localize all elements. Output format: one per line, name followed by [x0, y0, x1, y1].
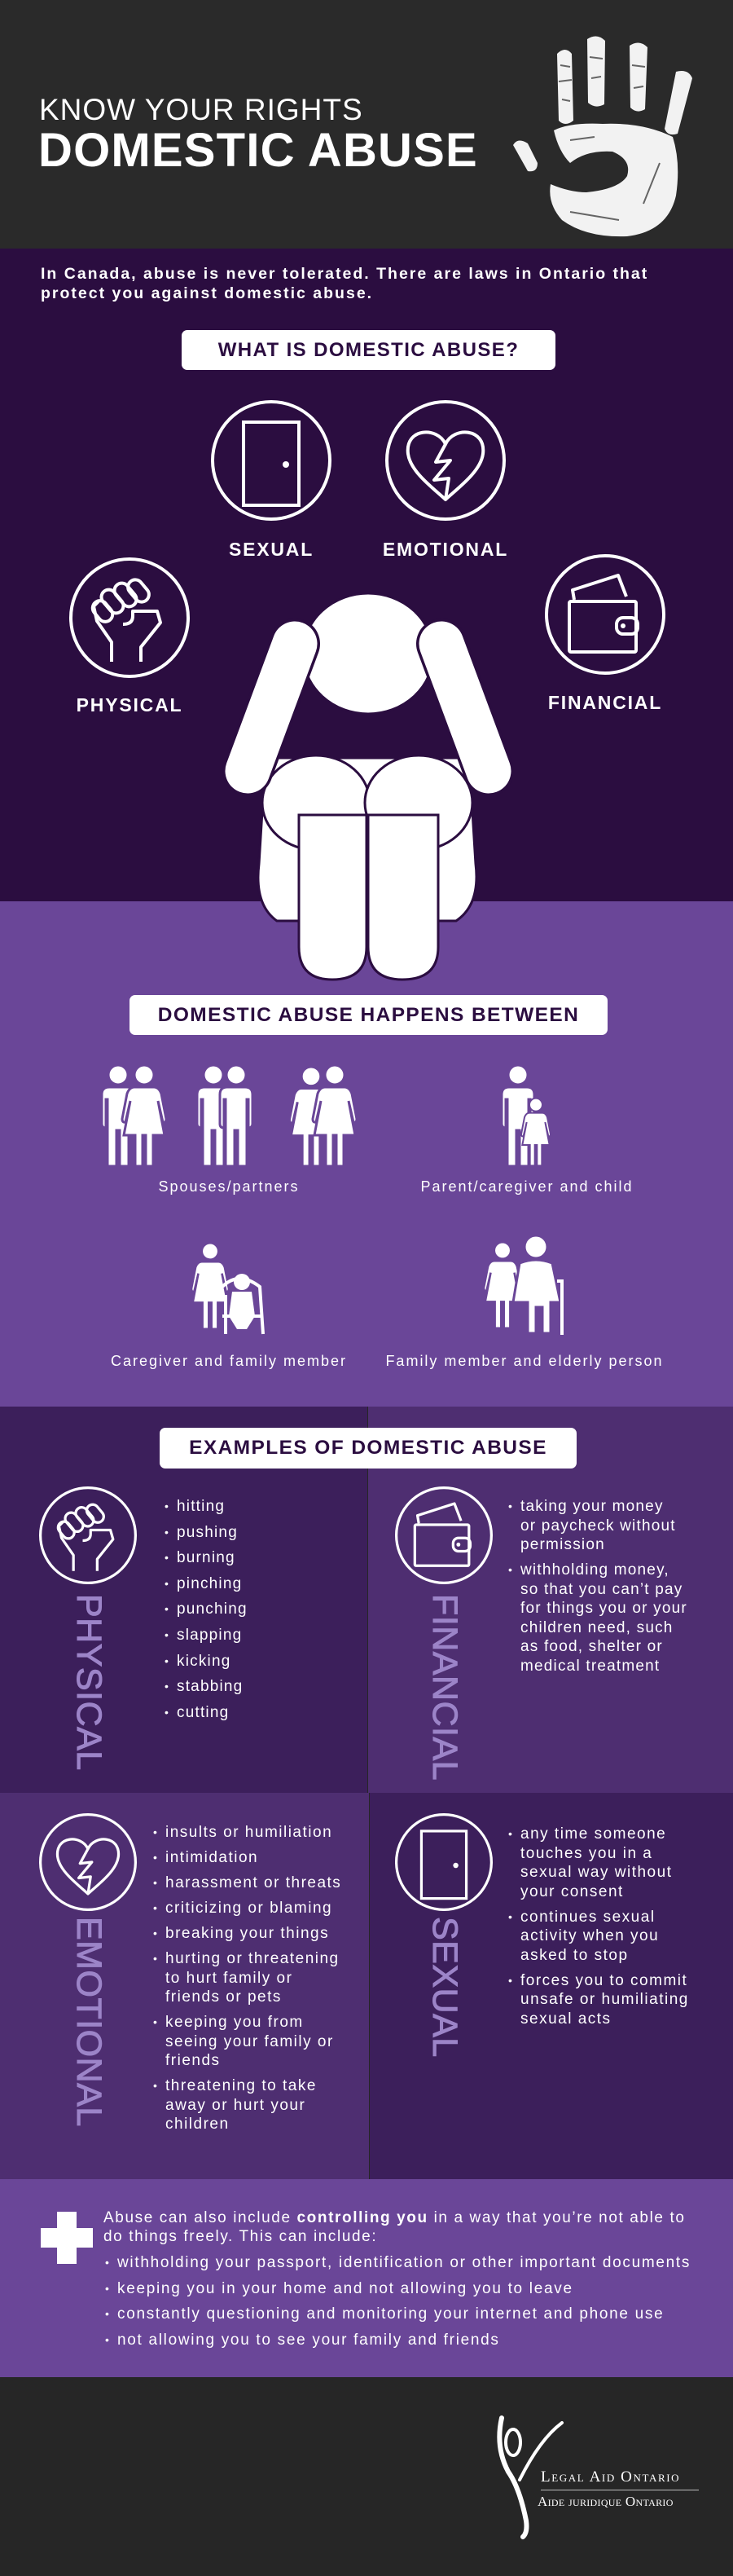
- list: financial: permission: [520, 1536, 605, 1553]
- icon: sexual door: [211, 400, 331, 521]
- list: sexual: forces you to commit: [520, 1972, 687, 1988]
- list: controlling: not allowing you to see your family and friends: [117, 2332, 500, 2349]
- heading box: what is domestic abuse: [182, 330, 555, 370]
- label: financial: FINANCIAL: [548, 692, 662, 713]
- panel: what is domestic abuse: [0, 249, 733, 901]
- heading box: happens between: DOMESTIC ABUSE HAPPENS BETWEEN: [158, 1004, 579, 1026]
- label: physical: PHYSICAL: [77, 694, 182, 716]
- list: physical: hitting: [177, 1498, 225, 1515]
- list: controlling: [106, 2254, 691, 2349]
- list: emotional: hurting or threatening: [165, 1950, 340, 1967]
- icon: financial wallet small: [395, 1486, 493, 1584]
- panel: examples emotional: [0, 1793, 369, 2179]
- list: emotional: friends or pets: [165, 1988, 282, 2006]
- icon: sexual door small: [395, 1813, 493, 1911]
- logo: legal aid ontario: Aide juridique Ontario: [538, 2494, 674, 2509]
- list: financial: so that you can’t pay: [520, 1581, 683, 1597]
- vertical label: financial: FINANCIAL: [425, 1594, 464, 1781]
- list: emotional: children: [165, 2116, 230, 2133]
- title: domestic abuse: DOMESTIC ABUSE: [38, 124, 478, 177]
- list: sexual: continues sexual: [520, 1909, 656, 1925]
- list: sexual: activity when you: [520, 1927, 659, 1944]
- caption: family member and elderly person: Family member and elderly person: [385, 1353, 664, 1369]
- vertical label: physical: PHYSICAL: [69, 1594, 108, 1771]
- heading box: happens between: [129, 995, 608, 1035]
- text: controlling intro: Abuse can also include controlling you in a way that you’re not able to: [103, 2209, 686, 2226]
- panel: examples physical: [0, 1407, 367, 1793]
- list: sexual: [508, 1825, 689, 2028]
- icon: financial wallet: [545, 554, 665, 675]
- heading box: what is domestic abuse: WHAT IS DOMESTIC ABUSE?: [218, 339, 519, 361]
- text: controlling intro: [103, 2209, 686, 2245]
- panel: controlling: [0, 2179, 733, 2377]
- vertical label: emotional: EMOTIONAL: [69, 1917, 108, 2127]
- list: sexual: asked to stop: [520, 1946, 629, 1964]
- list: physical: burning: [177, 1549, 235, 1566]
- heading box: examples: EXAMPLES OF DOMESTIC ABUSE: [189, 1437, 547, 1459]
- icon: emotional heart small: [39, 1813, 137, 1911]
- list: controlling: withholding your passport, identification or other important documents: [117, 2254, 691, 2271]
- list: physical: kicking: [177, 1653, 230, 1670]
- list: financial: withholding money,: [520, 1561, 669, 1579]
- icon: spouses couples: [103, 1066, 355, 1165]
- list: emotional: threatening to take: [165, 2077, 317, 2094]
- icon: emotional heart: [385, 400, 506, 521]
- panel: examples sexual: [370, 1793, 733, 2179]
- footer panel: [0, 2377, 733, 2576]
- list: emotional: intimidation: [165, 1849, 258, 1866]
- list: physical: [165, 1498, 248, 1721]
- icon: physical fist small: [39, 1486, 137, 1584]
- list: financial: as food, shelter or: [520, 1638, 663, 1655]
- caption: spouses/partners: Spouses/partners: [158, 1178, 300, 1195]
- panel: examples financial: [368, 1407, 733, 1793]
- list: emotional: away or hurt your: [165, 2096, 305, 2114]
- header panel: [0, 0, 733, 249]
- icon: parent and child: [503, 1066, 550, 1165]
- list: sexual: sexual acts: [520, 2010, 612, 2028]
- list: physical: pinching: [177, 1575, 242, 1592]
- text: controlling intro: do things freely. This can include:: [103, 2228, 377, 2245]
- logo: legal aid ontario: [497, 2415, 699, 2539]
- label: sexual: SEXUAL: [229, 539, 314, 560]
- intro text: In Canada, abuse is never tolerated. There are laws in Ontario that: [41, 265, 648, 283]
- list: physical: punching: [177, 1601, 248, 1618]
- list: emotional: to hurt family or: [165, 1969, 292, 1987]
- list: financial: children need, such: [520, 1618, 674, 1636]
- logo figure: [497, 2415, 564, 2539]
- list: physical: cutting: [177, 1704, 229, 1721]
- icon: family member and elderly person: [485, 1237, 564, 1335]
- list: emotional: friends: [165, 2052, 221, 2069]
- label: emotional: EMOTIONAL: [383, 539, 508, 560]
- list: emotional: harassment or threats: [165, 1874, 341, 1891]
- list: emotional: criticizing or blaming: [165, 1900, 332, 1917]
- title: know your rights: KNOW YOUR RIGHTS: [39, 93, 363, 126]
- icon: plus: [41, 2212, 93, 2264]
- list: controlling: constantly questioning and monitoring your internet and phone use: [117, 2305, 664, 2323]
- illustration: crouching figure: [225, 595, 511, 981]
- vertical label: sexual: SEXUAL: [425, 1917, 464, 2058]
- intro text: [41, 265, 648, 302]
- logo text: Legal Aid Ontario: [541, 2468, 680, 2486]
- list: financial: for things you or your: [520, 1600, 687, 1617]
- list: emotional: breaking your things: [165, 1925, 329, 1942]
- list: emotional: keeping you from: [165, 2014, 304, 2031]
- list: financial: taking your money: [520, 1498, 664, 1515]
- list: sexual: your consent: [520, 1882, 624, 1900]
- list: financial: or paycheck without: [520, 1517, 676, 1534]
- list: physical: pushing: [177, 1524, 238, 1541]
- list: sexual: touches you in a: [520, 1845, 652, 1861]
- list: emotional: [153, 1824, 341, 2133]
- list: sexual: sexual way without: [520, 1864, 672, 1881]
- list: emotional: insults or humiliation: [165, 1824, 332, 1841]
- caption: caregiver and family member: Caregiver and family member: [111, 1353, 347, 1369]
- panel: happens between: [0, 901, 733, 1407]
- list: emotional: seeing your family or: [165, 2032, 334, 2050]
- list: financial: [508, 1498, 687, 1674]
- icon: caregiver and wheelchair: [192, 1244, 265, 1335]
- caption: parent/caregiver and child: Parent/caregiver and child: [420, 1178, 634, 1195]
- list: physical: slapping: [177, 1627, 242, 1644]
- list: physical: stabbing: [177, 1678, 243, 1695]
- list: sexual: unsafe or humiliating: [520, 1991, 689, 2008]
- list: controlling: keeping you in your home and not allowing you to leave: [117, 2280, 573, 2297]
- list: sexual: any time someone: [520, 1825, 666, 1843]
- heading box: examples: [160, 1428, 577, 1469]
- list: financial: medical treatment: [520, 1658, 660, 1674]
- icon: physical fist: [69, 557, 190, 678]
- icon: handprint: [513, 36, 692, 236]
- intro text: protect you against domestic abuse.: [41, 284, 373, 302]
